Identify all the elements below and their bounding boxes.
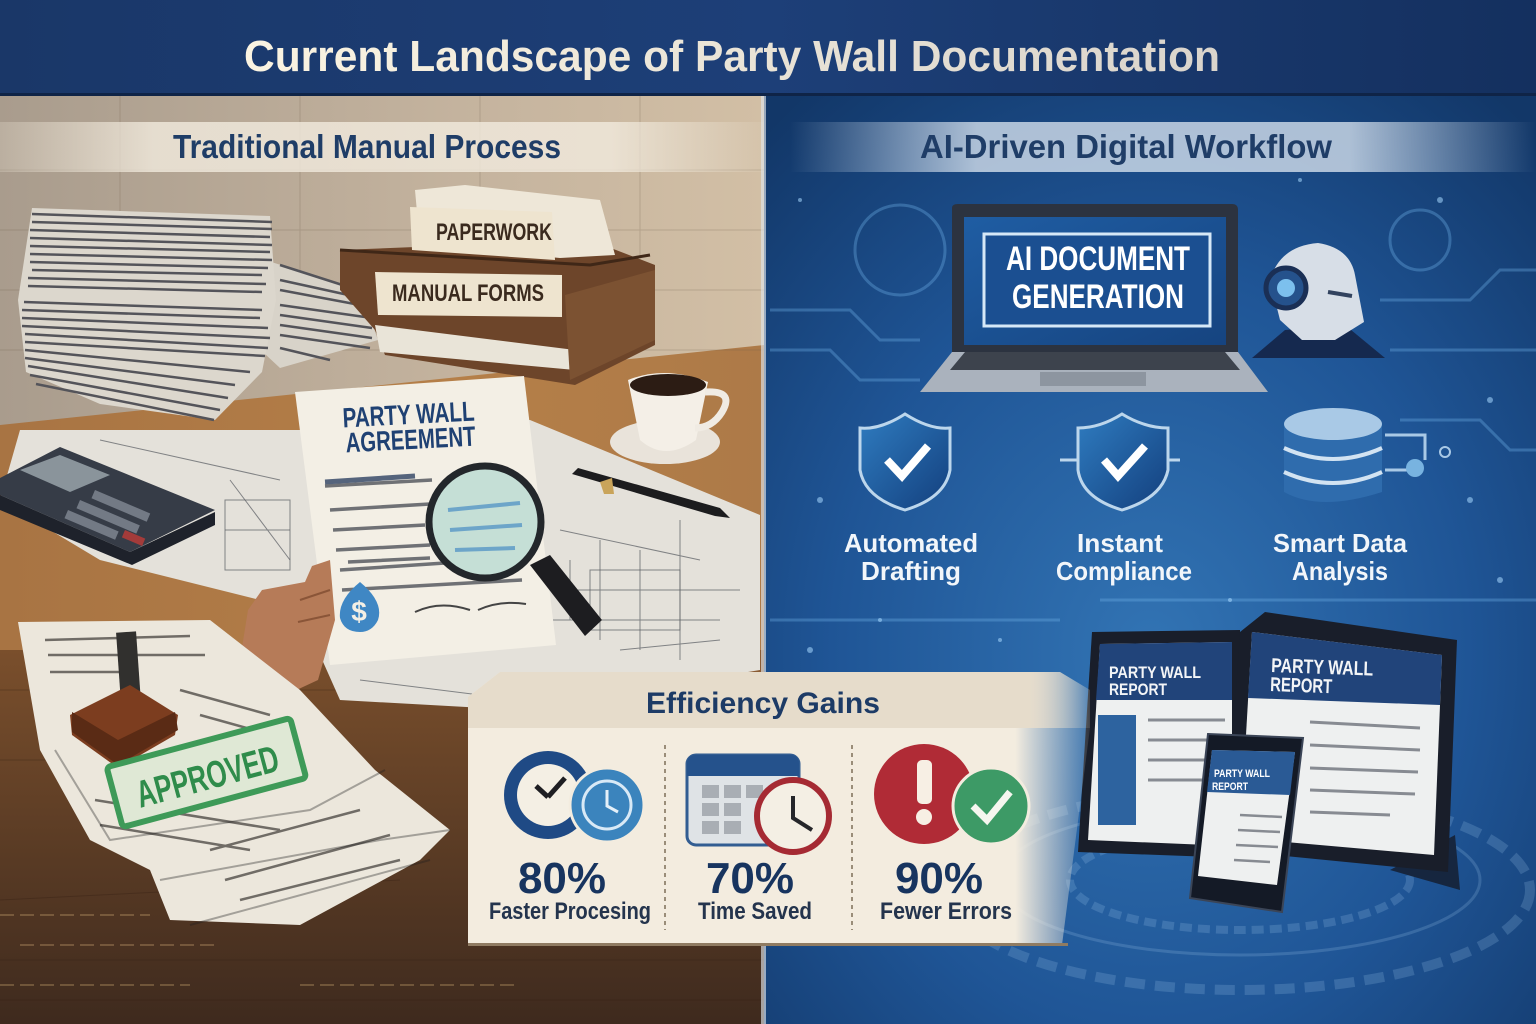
icon: books with labels <box>340 185 655 385</box>
title: Current Landscape of Party Wall Documentation <box>244 32 1220 81</box>
panel: efficiency gains <box>468 672 1090 946</box>
stat: 80% faster processing: Faster Procesing <box>489 898 651 925</box>
stat: 80% faster processing: 80% <box>518 854 606 903</box>
laptop screen label <box>984 234 1210 326</box>
icon: dollar badge: $ <box>351 596 367 627</box>
icon: shield check with circuit <box>1060 414 1180 510</box>
icon: coffee cup <box>610 373 726 464</box>
title bar <box>0 0 1536 96</box>
document: party wall agreement: PARTY WALL <box>342 396 475 433</box>
stat: 90% fewer errors: Fewer Errors <box>880 898 1012 925</box>
icon: pen <box>572 468 730 518</box>
feature: instant compliance: Instant <box>1077 528 1163 558</box>
icon: phone <box>1190 734 1303 912</box>
icon: tablet left: REPORT <box>1109 680 1168 699</box>
laptop screen label: GENERATION <box>1012 278 1184 316</box>
document: party wall agreement <box>295 376 556 665</box>
label: manual forms: MANUAL FORMS <box>392 280 544 307</box>
icon: database <box>1284 408 1450 502</box>
heading: AI-driven digital workflow <box>790 122 1536 172</box>
label: approved: APPROVED <box>132 738 284 817</box>
feature: instant compliance: Compliance <box>1056 556 1192 586</box>
label: paperwork <box>410 207 555 260</box>
icon: phone: PARTY WALL <box>1214 768 1270 780</box>
feature: instant compliance <box>1056 414 1192 586</box>
approved papers pile <box>18 620 450 925</box>
icon: calendar and clock <box>687 755 829 852</box>
heading: traditional manual process <box>0 122 764 172</box>
label: manual forms <box>375 272 562 317</box>
blueprints on desk <box>0 420 760 710</box>
floor circuit ring <box>950 790 1530 990</box>
heading: traditional manual process: Traditional Manual Process <box>173 128 561 165</box>
icon: stack of paper left <box>18 208 378 420</box>
feature: automated drafting: Drafting <box>861 556 961 586</box>
stat: 90% fewer errors: 90% <box>895 854 983 903</box>
feature: smart data analysis: Analysis <box>1292 556 1388 586</box>
feature: automated drafting: Automated <box>844 528 978 558</box>
icon: alert and check <box>874 744 1029 844</box>
icon: calculator <box>0 447 215 565</box>
icon: phone: REPORT <box>1212 781 1248 793</box>
document: party wall agreement: AGREEMENT <box>345 421 476 458</box>
feature: automated drafting <box>844 414 978 586</box>
feature: smart data analysis <box>1273 408 1450 586</box>
icon: magnifying glass <box>429 466 602 636</box>
icon: hand <box>240 560 335 700</box>
stat: 90% fewer errors <box>874 744 1029 925</box>
icon: approved stamp <box>70 631 178 768</box>
stat: 80% faster processing <box>489 751 651 925</box>
icon: tablet left <box>1078 630 1240 858</box>
icon: clocks <box>504 751 644 842</box>
label: paperwork: PAPERWORK <box>436 219 552 246</box>
icon: tablet right: REPORT <box>1270 674 1333 698</box>
icon: laptop <box>920 204 1268 392</box>
icon: dollar badge <box>340 582 379 632</box>
icon: tablet right: PARTY WALL <box>1271 655 1374 681</box>
stat: 70% time saved: Time Saved <box>698 898 812 925</box>
laptop screen label: AI DOCUMENT <box>1006 240 1190 278</box>
label: approved <box>107 718 306 827</box>
heading: efficiency gains: Efficiency Gains <box>646 687 880 720</box>
feature: smart data analysis: Smart Data <box>1273 528 1408 558</box>
icon: shield check <box>860 414 950 510</box>
panel: traditional manual process background <box>0 95 764 1024</box>
heading: AI-driven digital workflow: AI-Driven Digital Workflow <box>920 128 1332 165</box>
stat: 70% time saved <box>687 755 829 925</box>
panel: AI-driven digital workflow background <box>764 95 1536 1024</box>
icon: AI robot head <box>1252 243 1385 358</box>
stat: 70% time saved: 70% <box>706 854 794 903</box>
icon: tablet right <box>1225 612 1460 890</box>
icon: tablet left: PARTY WALL <box>1109 663 1201 682</box>
